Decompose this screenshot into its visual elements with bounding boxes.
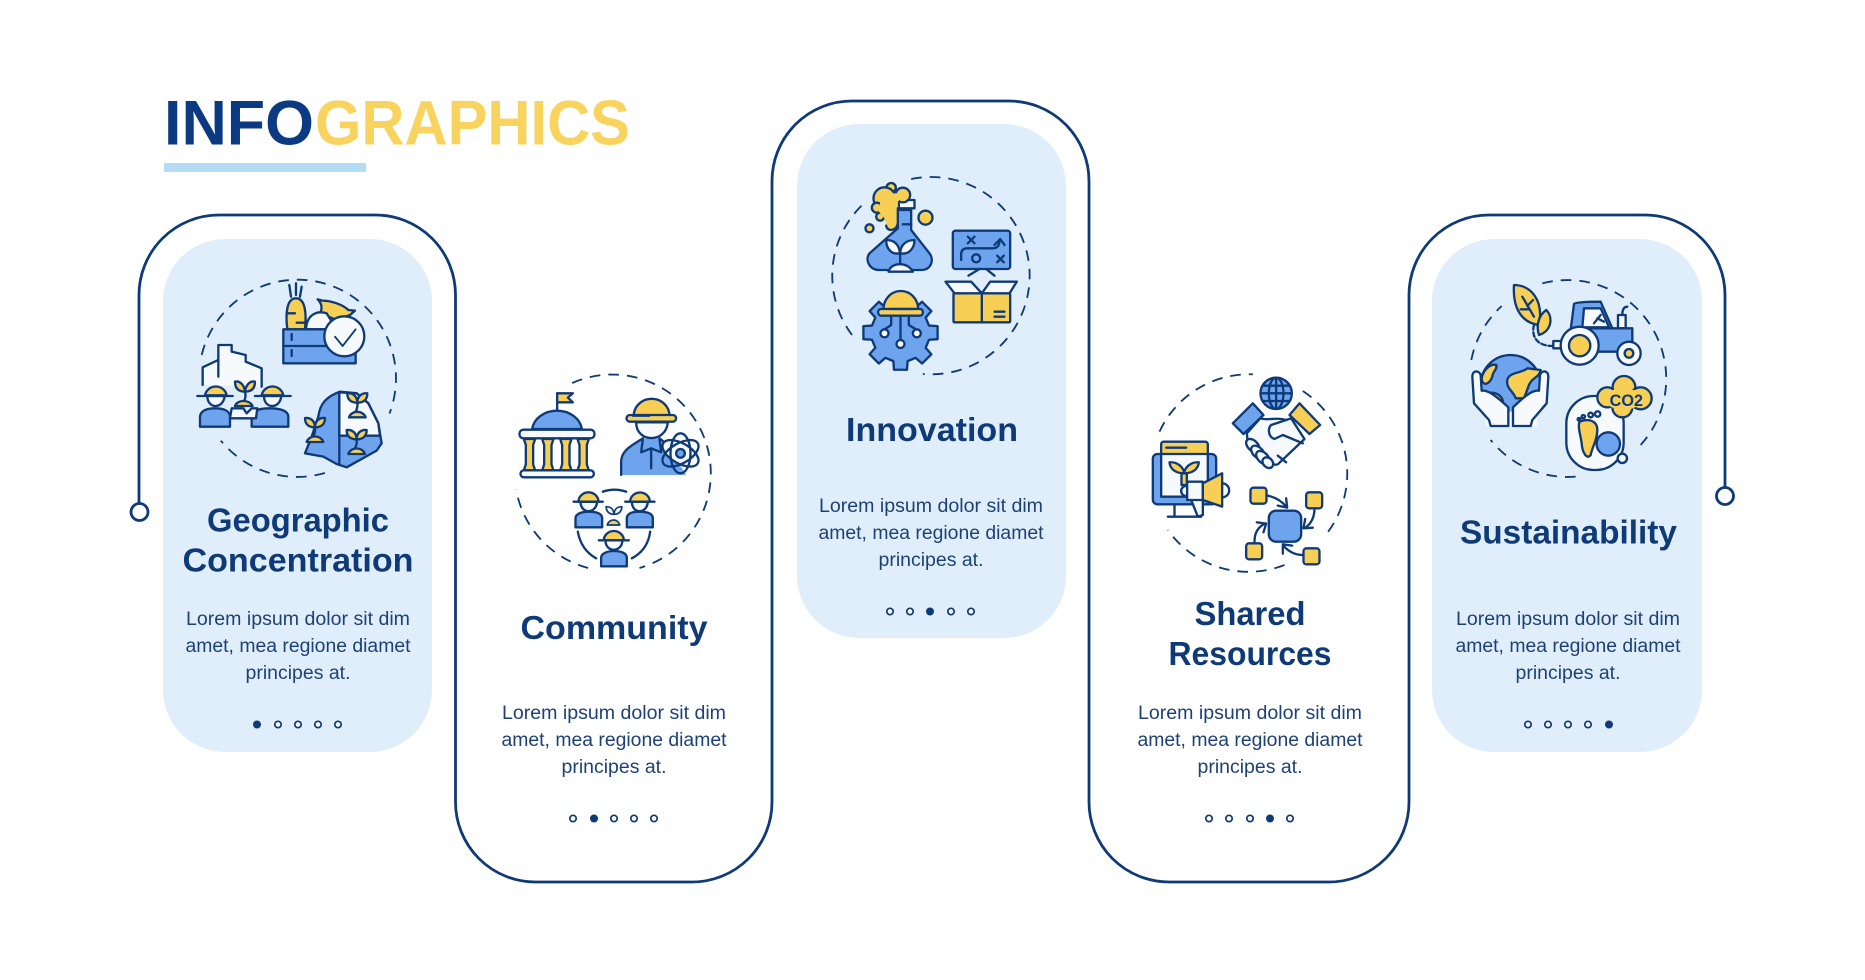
connector end dot: [1716, 488, 1734, 504]
pagination dots: [1206, 814, 1293, 822]
heading: Concentration: [182, 542, 414, 580]
heading: Shared: [1194, 596, 1306, 633]
body text: amet, mea regione diamet: [502, 730, 727, 751]
icon: agriculture cluster: [197, 280, 396, 477]
pagination dots: [887, 608, 974, 616]
heading: Resources: [1168, 636, 1332, 673]
heading: Community: [520, 610, 708, 647]
pagination dots: [570, 814, 657, 822]
heading: Sustainability: [1460, 514, 1677, 552]
body text: principes at.: [878, 550, 984, 571]
title: [164, 88, 630, 158]
heading: Innovation: [846, 412, 1018, 449]
body text: Lorem ipsum dolor sit dim: [502, 703, 726, 724]
body text: Lorem ipsum dolor sit dim: [1138, 703, 1362, 724]
panel: community: [502, 375, 727, 822]
icon: sustainability: CO2: [1610, 391, 1643, 410]
body text: [1138, 703, 1363, 778]
panel: geographic concentration: [182, 280, 414, 728]
body text: principes at.: [562, 757, 666, 778]
heading: [1168, 596, 1332, 673]
body text: amet, mea regione diamet: [1138, 730, 1363, 751]
title: GRAPHICS: [315, 88, 630, 158]
body text: [502, 703, 727, 778]
panel backgrounds: geographic concentration: [163, 239, 432, 752]
panel: shared resources: [1138, 374, 1363, 822]
body text: [1456, 609, 1681, 684]
heading: Geographic: [207, 502, 389, 540]
body text: principes at.: [246, 663, 350, 684]
body text: Lorem ipsum dolor sit dim: [819, 496, 1043, 517]
body text: amet, mea regione diamet: [818, 523, 1044, 544]
title underline: [164, 163, 366, 172]
title: INFO: [164, 88, 314, 158]
body text: principes at.: [1198, 757, 1302, 778]
body text: Lorem ipsum dolor sit dim: [1456, 609, 1680, 630]
connector start dot: [131, 504, 148, 520]
icon: innovation tools: [832, 177, 1030, 374]
panel: sustainability: [1456, 280, 1681, 728]
panel background: sustainability: [1432, 239, 1702, 752]
body text: [186, 609, 411, 684]
pagination dots: [1525, 720, 1613, 728]
icon: sustainability: [1471, 280, 1666, 477]
body text: [818, 496, 1044, 571]
body text: Lorem ipsum dolor sit dim: [186, 609, 410, 630]
icon: community institutions: [516, 375, 711, 568]
panel: innovation: [818, 177, 1044, 616]
icon: shared resources: [1153, 374, 1347, 572]
body text: principes at.: [1516, 663, 1620, 684]
pagination dots: [253, 720, 341, 728]
serpentine connector line: [139, 101, 1725, 882]
panel background: innovation: [797, 124, 1066, 638]
heading: [182, 502, 414, 580]
body text: amet, mea regione diamet: [186, 636, 411, 657]
body text: amet, mea regione diamet: [1456, 636, 1681, 657]
